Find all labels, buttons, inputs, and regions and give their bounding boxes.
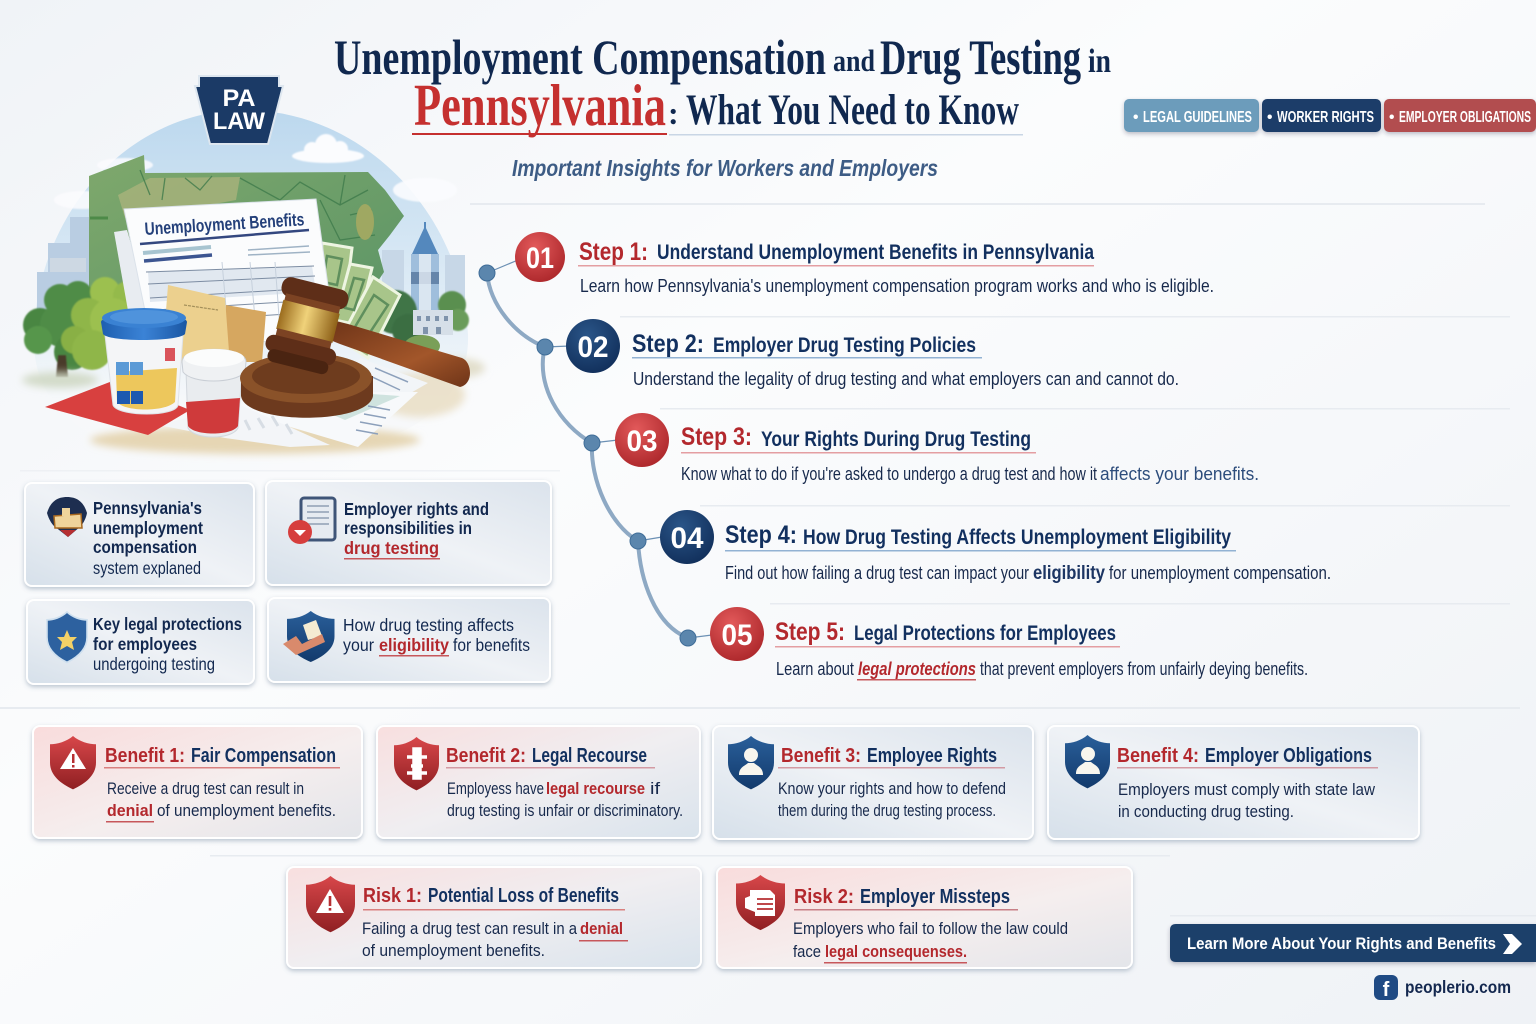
title: : bbox=[668, 95, 679, 131]
step 1: 01 bbox=[526, 242, 554, 275]
panel: employer rights card: responsibilities in bbox=[344, 518, 472, 538]
call to action button bbox=[1170, 924, 1536, 962]
step 5: 05 bbox=[722, 619, 752, 652]
gavel bbox=[261, 275, 470, 387]
panel: benefit 1 bbox=[33, 726, 362, 838]
title bbox=[334, 29, 1111, 138]
panel: risk 1: denial bbox=[580, 919, 623, 938]
step 3: Your Rights During Drug Testing bbox=[761, 428, 1031, 451]
urine specimen cup bbox=[101, 308, 187, 414]
badge: PA LAW: PA bbox=[222, 85, 256, 112]
step 4: Step 4: bbox=[725, 521, 797, 549]
badge: PA LAW: LAW bbox=[213, 108, 265, 135]
icon: clipboard with badge bbox=[288, 498, 335, 544]
panel: benefit 3: Know your rights and how to defend bbox=[778, 779, 1006, 798]
step 1 bbox=[479, 232, 1214, 296]
icon: legal shield bbox=[394, 737, 439, 790]
icon: facebook: f bbox=[1383, 979, 1390, 1001]
gavel sound block bbox=[240, 353, 373, 418]
step 4: eligibility bbox=[1033, 563, 1105, 584]
panel: eligibility card: How drug testing affects bbox=[343, 615, 514, 635]
step 1: Learn how Pennsylvania's unemployment compensation program works and who is eligible. bbox=[580, 276, 1214, 296]
icon: warning shield bbox=[306, 876, 355, 932]
illustration: legal and drug test scene bbox=[22, 110, 485, 454]
step 3: Know what to do if you're asked to undergo a drug test and how it bbox=[681, 464, 1097, 484]
icon: shield with star bbox=[47, 612, 87, 662]
right trees bbox=[373, 290, 469, 346]
title: and bbox=[833, 43, 875, 78]
panel: benefit 4: Benefit 4: bbox=[1117, 744, 1199, 767]
panel: risk 2: Employers who fail to follow the law could bbox=[793, 919, 1068, 938]
pill: worker rights: • bbox=[1267, 109, 1272, 126]
step 3: affects your benefits. bbox=[1100, 464, 1259, 484]
step 1: Understand Unemployment Benefits in Pennsylvania bbox=[657, 241, 1094, 264]
icon: shield with hands bbox=[283, 611, 334, 662]
pill: legal guidelines: • bbox=[1133, 109, 1138, 126]
icon: building with red marker bbox=[47, 497, 87, 537]
panel: benefit 3: them during the drug testing process. bbox=[778, 801, 996, 820]
step 4: 04 bbox=[670, 522, 704, 555]
panel: eligibility card bbox=[268, 598, 550, 682]
step 2: 02 bbox=[578, 331, 608, 364]
panel: benefit 1: denial bbox=[107, 801, 153, 820]
step 1: Step 1: bbox=[579, 238, 648, 266]
panel: legal protections card bbox=[27, 600, 254, 684]
panel: risk 2 bbox=[717, 867, 1132, 968]
panel: unemployment system card: Pennsylvania's bbox=[93, 498, 202, 518]
benefits document bbox=[114, 199, 330, 345]
title: Unemployment Compensation bbox=[334, 29, 826, 85]
panel: risk 1 bbox=[287, 867, 701, 968]
panel: employer rights card: drug testing bbox=[344, 538, 439, 558]
title: Drug Testing bbox=[880, 29, 1081, 85]
map details bbox=[90, 170, 375, 240]
benefits document: Unemployment Benefits bbox=[144, 209, 305, 239]
panel: benefit 3 bbox=[713, 726, 1033, 839]
pill: employer obligations bbox=[1384, 99, 1536, 132]
lower papers bbox=[158, 358, 428, 447]
panel: benefit 1: Fair Compensation bbox=[191, 744, 336, 767]
panel: benefit 1: Receive a drug test can result in bbox=[107, 779, 304, 798]
step path connector bbox=[487, 260, 712, 638]
left trees bbox=[23, 277, 154, 377]
panel: risk 2: Risk 2: bbox=[794, 885, 854, 908]
step 5: legal protections bbox=[858, 659, 976, 679]
panel: employer rights card bbox=[266, 481, 551, 585]
panel: legal protections card: Key legal protections bbox=[93, 614, 242, 634]
icon: warning shield bbox=[50, 736, 96, 789]
skyline right bbox=[382, 250, 465, 320]
panel: eligibility card: eligibility bbox=[379, 635, 449, 655]
panel: employer rights card: Employer rights and bbox=[344, 499, 489, 519]
sky dome bbox=[34, 110, 468, 452]
title: in bbox=[1088, 43, 1111, 80]
panel: legal protections card: for employees bbox=[93, 634, 197, 654]
Pennsylvania map bbox=[89, 155, 404, 330]
website credit bbox=[1374, 975, 1511, 1001]
panel: benefit 4: Employers must comply with state law bbox=[1118, 780, 1376, 799]
icon: person shield bbox=[728, 736, 774, 789]
step 2: Understand the legality of drug testing and what employers can and cannot do. bbox=[633, 369, 1179, 389]
manila folders bbox=[162, 285, 266, 365]
panel: unemployment system card: unemployment bbox=[93, 518, 203, 538]
panel: benefit 2: if bbox=[650, 779, 660, 798]
panel: benefit 3: Benefit 3: bbox=[781, 744, 861, 767]
title: Pennsylvania bbox=[414, 72, 666, 138]
panel: benefit 4: in conducting drug testing. bbox=[1118, 802, 1294, 821]
panel: risk 1: Risk 1: bbox=[363, 884, 422, 907]
panel: benefit 4 bbox=[1048, 726, 1419, 839]
money bbox=[318, 243, 400, 358]
step 5: Step 5: bbox=[775, 618, 845, 646]
panel: risk 2: Employer Missteps bbox=[860, 885, 1010, 908]
icon: chevron arrow bbox=[1503, 934, 1522, 954]
church tower bbox=[411, 222, 439, 312]
panel: benefit 2: drug testing is unfair or discriminatory. bbox=[447, 801, 683, 820]
panel: risk 1: Failing a drug test can result in a bbox=[362, 919, 577, 938]
step 2: Employer Drug Testing Policies bbox=[713, 334, 976, 357]
step 3 bbox=[584, 413, 1259, 484]
step 5 bbox=[680, 607, 1308, 680]
icon: person shield bbox=[1065, 735, 1110, 788]
step 4: Find out how failing a drug test can impact your bbox=[725, 563, 1029, 583]
skyline left bbox=[37, 217, 90, 322]
step 4: for unemployment compensation. bbox=[1109, 563, 1331, 583]
step 5: Legal Protections for Employees bbox=[854, 622, 1116, 645]
subtitle: Important Insights for Workers and Employers bbox=[512, 155, 938, 181]
panel: legal protections card: undergoing testing bbox=[93, 654, 215, 674]
panel: unemployment system card: system explaned bbox=[93, 558, 201, 578]
website credit: peoplerio.com bbox=[1405, 977, 1511, 997]
step 2: Step 2: bbox=[632, 330, 704, 358]
ground bbox=[22, 358, 485, 454]
panel: benefit 2: Legal Recourse bbox=[532, 744, 647, 767]
panel: benefit 4: Employer Obligations bbox=[1205, 744, 1372, 767]
tag pills bbox=[1124, 99, 1536, 132]
panel: benefit 1: Benefit 1: bbox=[105, 744, 185, 767]
step 5: Learn about bbox=[776, 659, 854, 679]
step 4: How Drug Testing Affects Unemployment Eligibility bbox=[803, 526, 1231, 549]
panel: benefit 2: Benefit 2: bbox=[446, 744, 526, 767]
panel: risk 1: Potential Loss of Benefits bbox=[428, 884, 619, 907]
step 3: 03 bbox=[626, 425, 658, 458]
badge: PA LAW bbox=[195, 76, 283, 144]
step 2 bbox=[537, 319, 1179, 389]
panel: risk 2: legal consequenses. bbox=[825, 942, 967, 961]
small specimen jar bbox=[182, 349, 246, 437]
panel: benefit 2: Employess have bbox=[447, 779, 544, 798]
pill: legal guidelines: LEGAL GUIDELINES bbox=[1143, 109, 1252, 126]
red folder bbox=[45, 380, 190, 435]
panel: eligibility card: for benefits bbox=[453, 635, 530, 655]
clouds bbox=[54, 134, 457, 209]
pill: worker rights bbox=[1262, 99, 1381, 132]
panel: unemployment system card bbox=[25, 483, 254, 586]
panel: risk 1: of unemployment benefits. bbox=[362, 941, 545, 960]
panel: benefit 2 bbox=[377, 726, 700, 838]
pill: worker rights: WORKER RIGHTS bbox=[1277, 109, 1374, 126]
pill: legal guidelines bbox=[1124, 99, 1259, 132]
pill: employer obligations: • bbox=[1389, 109, 1394, 126]
call to action button: Learn More About Your Rights and Benefits bbox=[1187, 934, 1496, 953]
church building bbox=[404, 310, 453, 357]
step 4 bbox=[630, 510, 1331, 584]
icon: document shield bbox=[736, 875, 785, 930]
title: What You Need to Know bbox=[686, 87, 1019, 134]
panel: benefit 1: of unemployment benefits. bbox=[157, 801, 336, 820]
step 3: Step 3: bbox=[681, 423, 752, 451]
panel: eligibility card: your bbox=[343, 635, 374, 655]
panel: benefit 2: legal recourse bbox=[546, 779, 645, 798]
step 5: that prevent employers from unfairly deying benefits. bbox=[980, 659, 1308, 679]
panel: unemployment system card: compensation bbox=[93, 537, 197, 557]
panel: benefit 3: Employee Rights bbox=[867, 744, 997, 767]
panel: risk 2: face bbox=[793, 942, 821, 961]
